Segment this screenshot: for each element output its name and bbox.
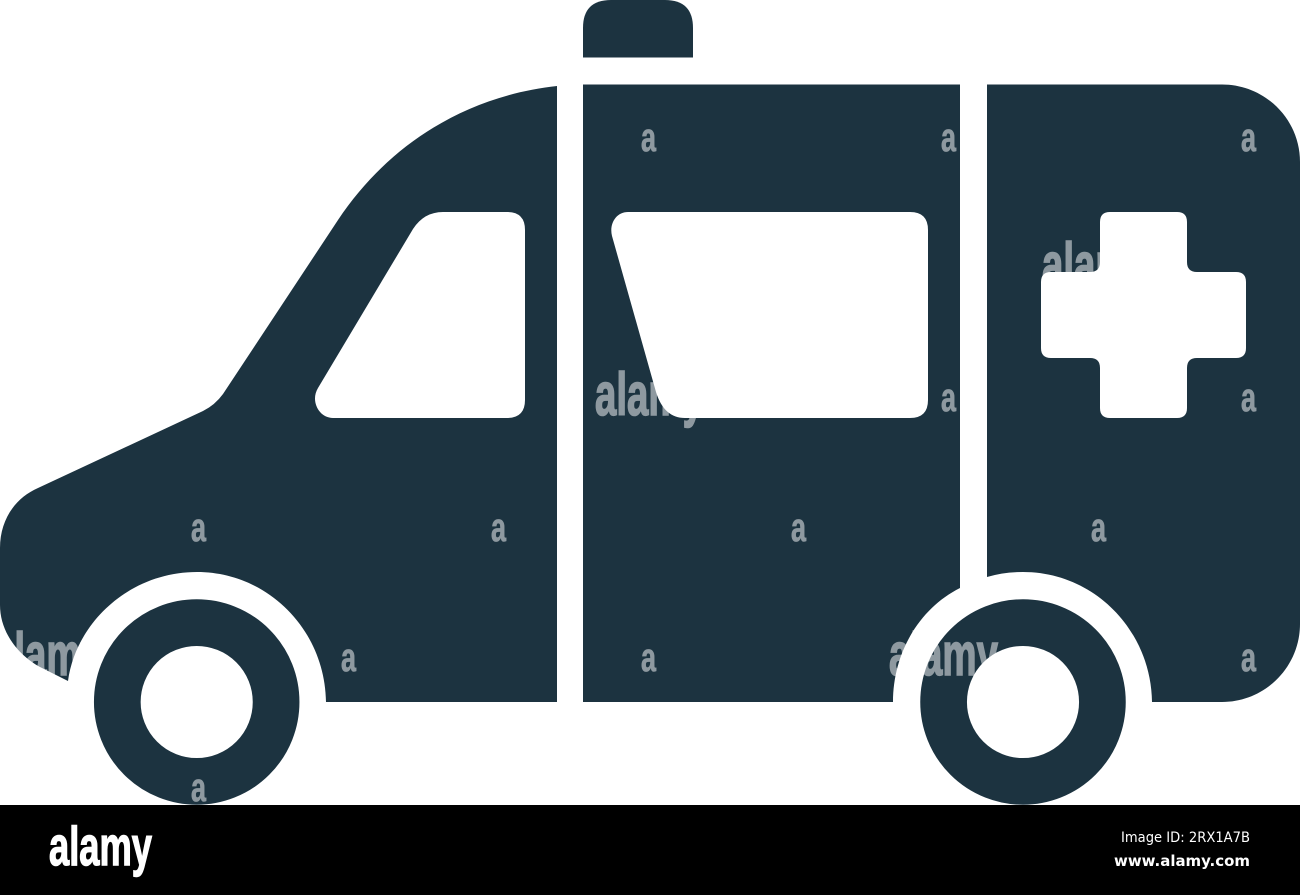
watermark words: alamy [595,361,704,428]
alamy logo: alamy [49,815,152,877]
watermark letters: a [341,636,357,680]
watermark letters: a [641,636,657,680]
watermark letters: a [1241,376,1257,420]
watermark letters: a [1241,116,1257,160]
watermark letters: a [641,116,657,160]
watermark words: alamy [889,621,998,688]
watermark letters: a [1241,636,1257,680]
watermark letters: a [191,506,207,550]
website: www.alamy.com [1114,852,1250,870]
watermark letters: a [491,506,507,550]
rear wheel [944,623,1102,781]
middle door panel [583,84,960,702]
watermark words: alamy [1042,231,1151,298]
watermark words [0,231,1151,688]
watermark letters: a [941,376,957,420]
image id: Image ID: 2RX1A7B [1121,830,1250,846]
watermark letters [191,116,1257,810]
rear panel with medical cross [987,84,1300,702]
front cab panel [0,86,557,702]
siren light [583,0,693,58]
watermark letters: a [1091,506,1107,550]
watermarks [0,116,1257,810]
front wheel [117,623,276,781]
watermark letters: a [791,506,807,550]
watermark letters: a [191,766,207,810]
watermark letters: a [941,116,957,160]
footer bar [0,805,1300,895]
